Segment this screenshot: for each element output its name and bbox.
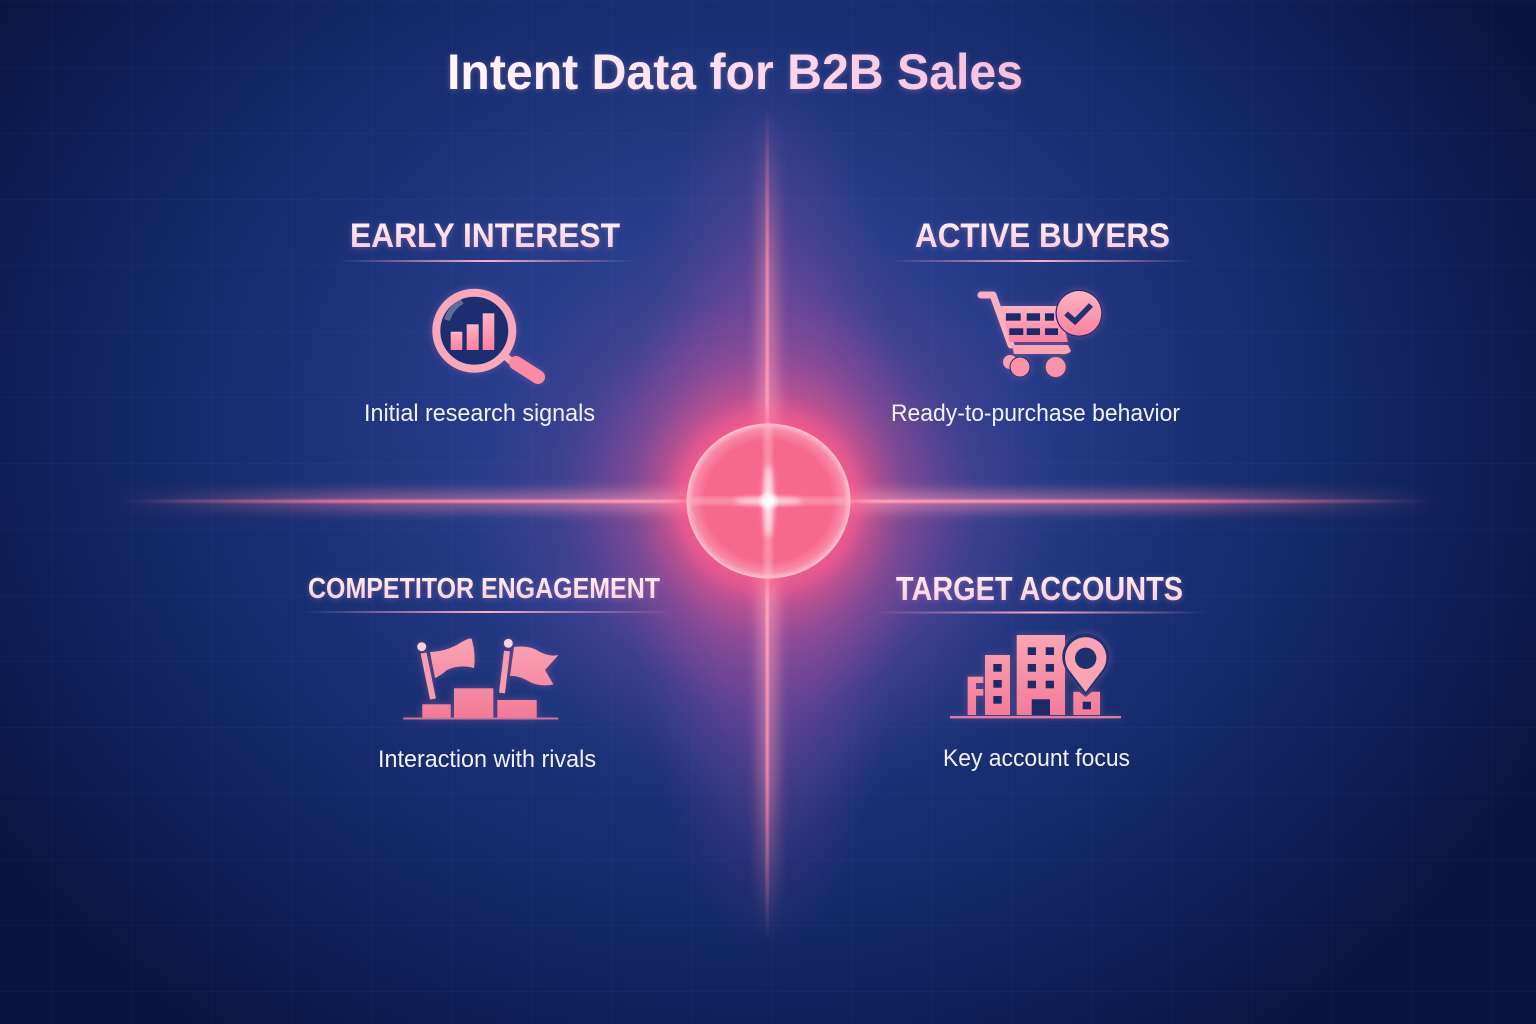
heading: competitor engagement: COMPETITOR ENGAGEMENT xyxy=(308,573,660,605)
icon: magnifier with bars xyxy=(436,293,538,377)
icon: buildings with location pin xyxy=(950,633,1121,718)
icon: flags on podium xyxy=(403,639,558,720)
panel: target accounts xyxy=(872,570,1208,772)
description: target accounts: Key account focus xyxy=(943,745,1130,772)
icon: shopping cart with check xyxy=(981,290,1102,377)
central glowing orb xyxy=(680,418,856,584)
heading: target accounts: TARGET ACCOUNTS xyxy=(896,570,1183,607)
description: active buyers: Ready-to-purchase behavior xyxy=(891,400,1180,427)
central cross of glowing lines xyxy=(110,51,1440,951)
description: early interest: Initial research signals xyxy=(364,400,595,427)
heading: early interest: EARLY INTEREST xyxy=(350,217,620,255)
panel: competitor engagement xyxy=(302,573,672,773)
heading: active buyers: ACTIVE BUYERS xyxy=(915,217,1170,255)
title: Intent Data for B2B Sales xyxy=(447,44,1023,100)
description: competitor engagement: Interaction with rivals xyxy=(378,746,596,773)
panel: active buyers xyxy=(890,217,1192,427)
panel: early interest xyxy=(338,217,636,427)
